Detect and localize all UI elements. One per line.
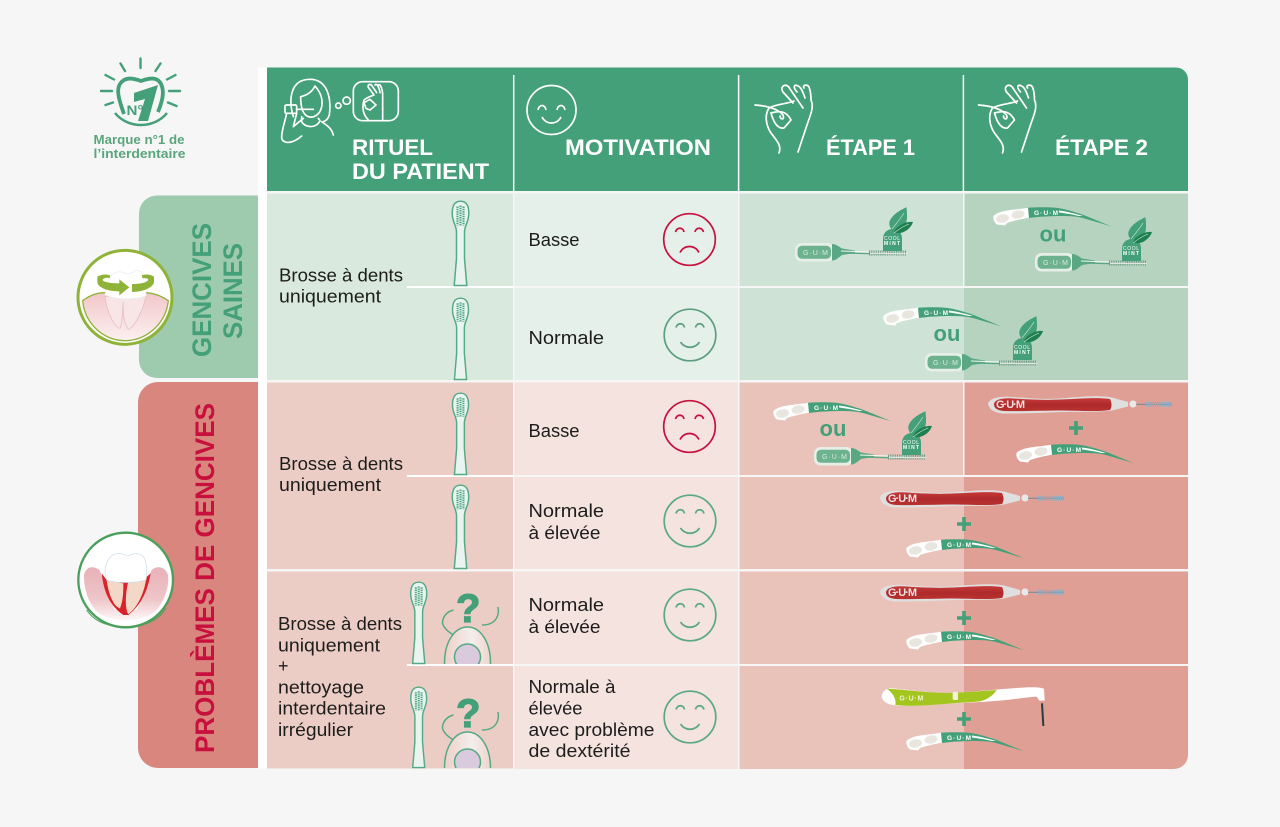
products: row 6 [882, 687, 1045, 751]
heading: étape 2: ÉTAPE 2 [1055, 135, 1148, 160]
products: row 1 step 2: G·U·M [1034, 210, 1058, 217]
motivation: basse row 3: Basse [528, 421, 580, 441]
motivation: dextérité row 6: avec problème [528, 720, 654, 740]
products: row 3 step 1 [773, 402, 932, 466]
heading: rituel du patient: DU PATIENT [352, 159, 490, 184]
tab: gencives saines: GENCIVES [187, 223, 217, 357]
white strip [258, 68, 267, 768]
text: brosse à dents + nettoyage irrégulier: interdentaire [278, 698, 386, 718]
icon: header smile [527, 86, 576, 134]
icon: toothbrush row 5 [411, 582, 427, 664]
motivation: dextérité row 6: élevée [528, 698, 582, 718]
motivation: normale à élevée row 5 [528, 589, 716, 641]
icon: floss question row 5 [442, 594, 500, 664]
tab: gencives saines [139, 196, 258, 378]
motivation: normale row 2 [528, 309, 716, 361]
text: brosse à dents uniquement [279, 454, 403, 495]
icon: toothbrush row 4 [452, 485, 469, 569]
products: row 4: G·U·M [888, 493, 917, 505]
icon: hand step 2 [978, 85, 1036, 153]
motivation: normale à élevée row 4: Normale [528, 501, 604, 521]
products: row 1 step 2 [993, 207, 1152, 272]
text: brand claim [94, 132, 186, 161]
heading: rituel du patient [352, 135, 490, 184]
motivation: basse row 3 [528, 401, 715, 452]
icon: hand step 1 [755, 85, 812, 153]
text: brand claim: Marque n°1 de [94, 132, 184, 147]
products: row 4: G·U·M [947, 542, 971, 549]
motivation: normale à élevée row 5: Normale [528, 595, 604, 615]
text: brosse à dents uniquement: uniquement [279, 286, 381, 306]
tab: problèmes de gencives [138, 382, 258, 768]
row 5-6 rituel: toothbrush and irregular interdental [278, 582, 498, 785]
products: row 5: G·U·M [947, 634, 971, 641]
motivation: dextérité row 6 [528, 677, 716, 761]
icon: cool mint [1122, 218, 1152, 261]
table body backgrounds [267, 194, 1188, 769]
products: row 2: G·U·M [924, 310, 948, 317]
icon: cool mint [883, 208, 913, 251]
products: row 5 [880, 584, 1064, 650]
products: row 2 [883, 307, 1043, 372]
icon: cool mint: COOL [903, 440, 919, 446]
products: row 3 step 1: ou [820, 416, 846, 441]
text: brosse à dents + nettoyage irrégulier: Brosse à dents [278, 614, 402, 634]
motivation: normale à élevée row 4 [528, 495, 716, 547]
icon: floss question row 5: ? [456, 587, 480, 631]
text: brosse à dents + nettoyage irrégulier: irrégulier [278, 720, 353, 740]
logo: Marque n°1 de l'interdentaire [94, 58, 186, 161]
header band [267, 68, 1188, 191]
products: row 1 step 1 [795, 208, 913, 262]
icon: toothbrush row 2 [452, 298, 469, 380]
icon: cool mint [902, 412, 932, 455]
products: row 2: ou [934, 321, 960, 346]
products: row 4 [880, 490, 1064, 558]
products: row 1 step 2: ou [1040, 222, 1066, 246]
icon: gum problem tooth [78, 533, 173, 627]
text: brosse à dents + nettoyage irrégulier: + [278, 656, 289, 676]
text: brosse à dents uniquement: Brosse à dents [279, 454, 403, 474]
icon: tooth n°1 with rays: N° [126, 102, 144, 118]
text: brosse à dents + nettoyage irrégulier [278, 614, 402, 740]
icon: healthy tooth with green arrows [78, 250, 172, 344]
motivation: basse row 1 [528, 214, 715, 265]
heading: étape 1: ÉTAPE 1 [826, 135, 915, 160]
row 3-4 rituel: toothbrush only [279, 393, 469, 569]
products: row 2: G·U·M [933, 360, 958, 367]
text: brosse à dents uniquement: Brosse à dents [279, 266, 403, 286]
products: row 3 step 1: G·U·M [822, 454, 847, 461]
icon: cool mint: MINT [1014, 350, 1030, 356]
row 1-2 rituel: toothbrush only [279, 201, 469, 380]
motivation: dextérité row 6: de dextérité [528, 741, 630, 761]
motivation: dextérité row 6: Normale à [528, 677, 617, 697]
products: row 1 step 1: G·U·M [803, 250, 828, 257]
icon: cool mint: COOL [1014, 345, 1030, 351]
icon: cool mint: COOL [1123, 246, 1139, 252]
text: brosse à dents + nettoyage irrégulier: nettoyage [278, 678, 364, 698]
icon: toothbrush row 3 [452, 393, 469, 475]
products: row 6: G·U·M [899, 696, 924, 703]
heading: rituel du patient: RITUEL [352, 135, 433, 160]
icon: toothbrush row 1 [452, 201, 469, 286]
icon: floss question row 6 [442, 698, 500, 768]
products: row 6: G·U·M [947, 735, 971, 742]
icon: cool mint: MINT [884, 241, 900, 247]
icon: cool mint: MINT [1123, 251, 1139, 257]
text: brand claim: l’interdentaire [94, 146, 186, 161]
products: row 3 step 2: G·U·M [1057, 447, 1081, 454]
products: row 1 step 2: G·U·M [1043, 260, 1068, 267]
text: brosse à dents uniquement: uniquement [279, 475, 381, 495]
heading: motivation: MOTIVATION [565, 135, 711, 160]
text: brosse à dents uniquement [279, 266, 403, 306]
text: brosse à dents + nettoyage irrégulier: uniquement [278, 636, 380, 656]
motivation: basse row 1: Basse [528, 230, 580, 250]
tab: gencives saines: SAINES [218, 243, 248, 339]
icon: cool mint [1013, 317, 1043, 360]
icon: cool mint: MINT [903, 445, 919, 451]
products: row 3 step 2: G·U·M [996, 399, 1025, 411]
icon: patient brushing and thinking of interdental [282, 79, 398, 142]
icon: floss question row 6: ? [456, 692, 480, 736]
motivation: normale à élevée row 5: à élevée [528, 617, 600, 637]
tab: problèmes de gencives: PROBLÈMES DE GENCIVES [190, 403, 220, 753]
motivation: normale à élevée row 4: à élevée [528, 523, 600, 543]
products: row 5: G·U·M [888, 587, 917, 599]
icon: toothbrush row 6 [411, 687, 427, 768]
products: row 3 step 1: G·U·M [814, 405, 838, 412]
products: row 3 step 2 [988, 396, 1172, 463]
icon: cool mint: COOL [884, 236, 900, 242]
motivation: normale row 2: Normale [528, 328, 604, 348]
